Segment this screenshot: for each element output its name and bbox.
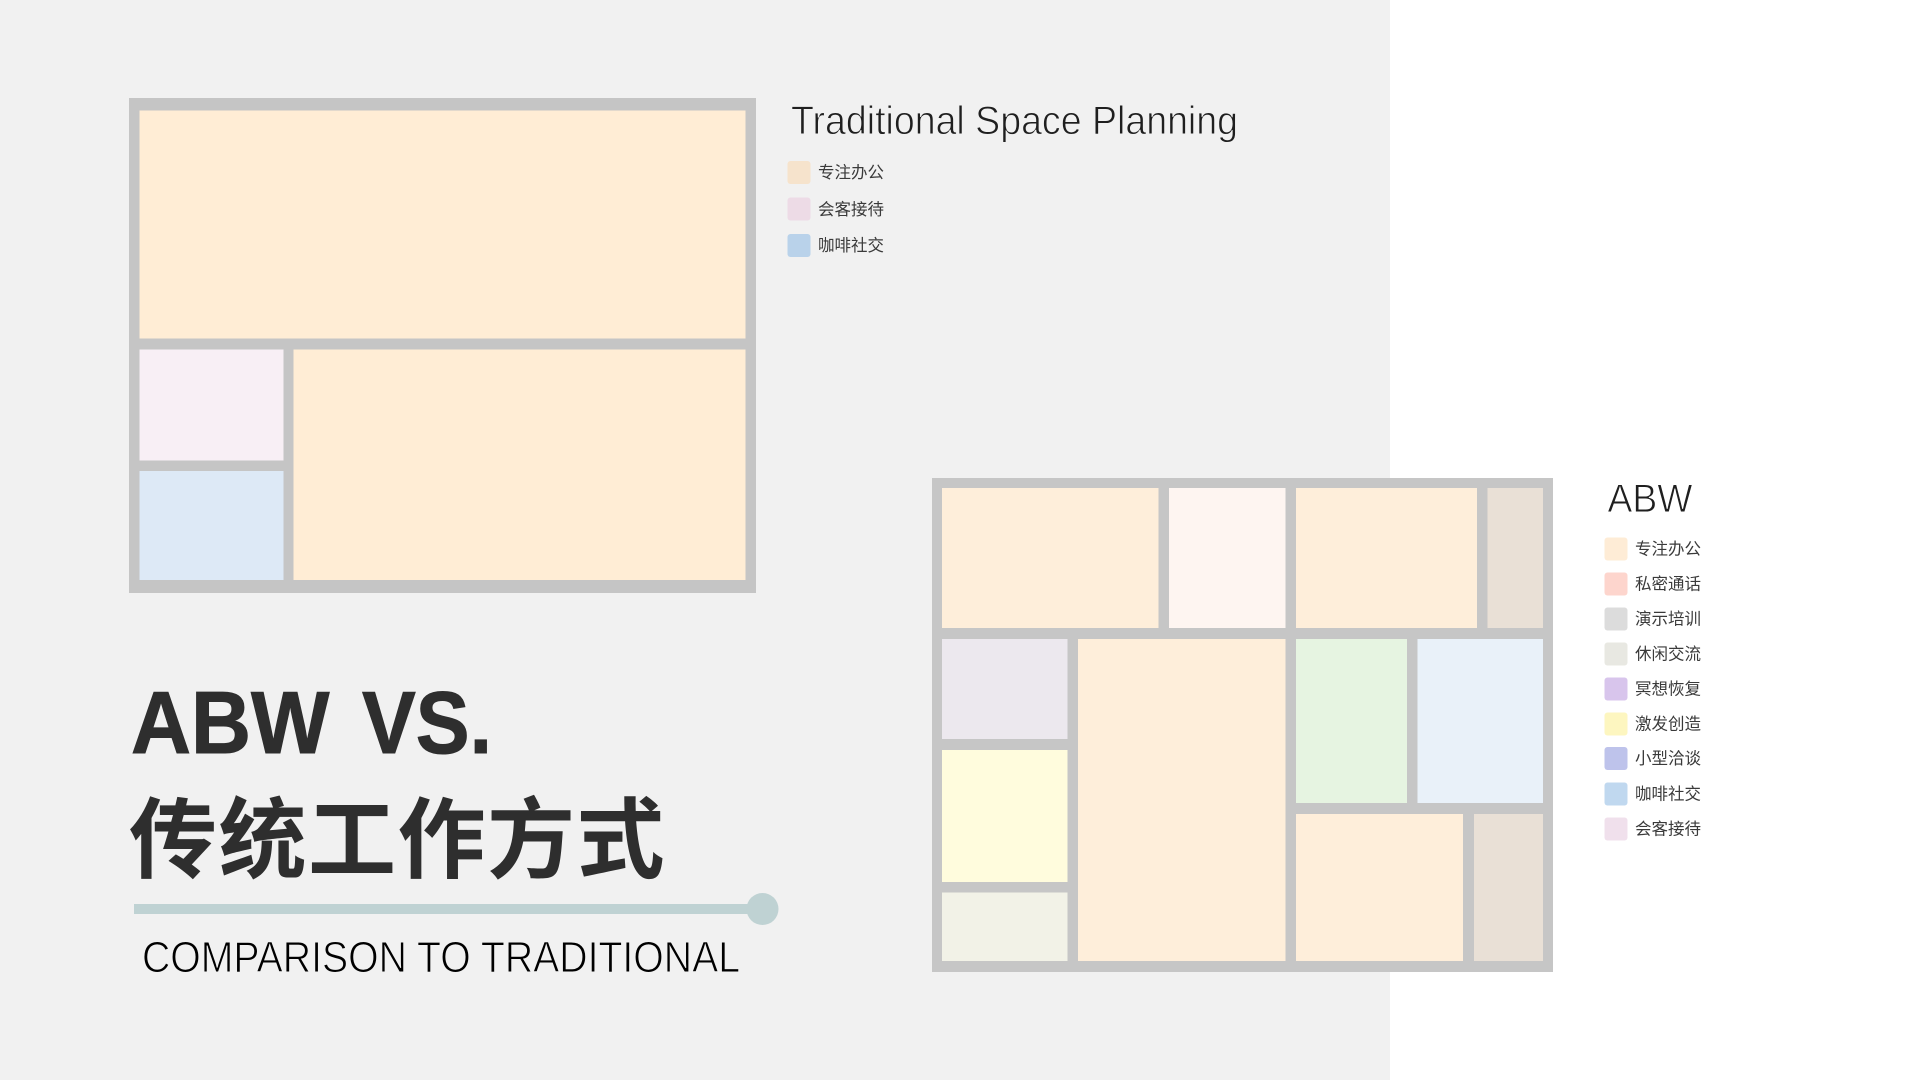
zone: focus work 1 [942,488,1158,628]
zone: focus work 3 [1296,814,1463,961]
legend: traditional [788,161,884,257]
title line 1 [131,673,492,772]
legend item: reception: 会客接待 [1635,820,1701,838]
legend item: private call: 私密通话 [1635,574,1701,594]
legend item: private call [1604,572,1701,596]
zone: leisure [942,892,1068,961]
legend item: focus work: 专注办公 [1635,540,1701,558]
zone: focus work 2 [1296,488,1477,628]
legend item: presentation [1604,608,1701,630]
title line 2: 传统工作方式 [129,791,666,890]
legend item: coffee social [1604,782,1701,806]
legend item: creativity: 激发创造 [1635,714,1702,734]
legend item: leisure [1604,642,1701,666]
legend item: reception: 会客接待 [818,200,884,219]
zone: creativity [942,750,1068,882]
heading: traditional space planning: Traditional Space Planning [791,99,1238,143]
background panel [0,0,1390,1080]
zone: presentation bottom [1474,814,1543,961]
legend item: presentation: 演示培训 [1635,610,1701,628]
legend: ABW [1604,538,1702,840]
zone: coffee [1418,639,1543,803]
divider line with dot [134,893,778,925]
heading: ABW: ABW [1608,477,1693,521]
zone: private call [1169,488,1286,628]
legend item: coffee social: 咖啡社交 [818,236,884,255]
zone: reception [140,350,284,460]
legend item: coffee social: 咖啡社交 [1635,784,1701,804]
legend item: leisure: 休闲交流 [1635,644,1701,664]
legend item: focus work [1604,538,1701,560]
title line 1: VS. [362,673,492,772]
legend item: meditation [1604,678,1701,700]
legend item: focus work: 专注办公 [818,163,884,182]
floor plan: traditional [129,98,756,593]
zone: presentation top [1488,488,1543,628]
zone: focus work bottom [294,350,746,580]
zone: coffee social [140,471,284,580]
legend item: reception [1604,818,1701,840]
subtitle: COMPARISON TO TRADITIONAL [142,933,740,982]
legend item: small meeting [1604,747,1702,770]
zone: meditation [942,639,1068,739]
zone: focus work centre [1078,639,1286,961]
zone: small meeting [1296,639,1407,803]
title [129,673,666,890]
zone: focus work top [140,110,746,338]
title line 1: ABW [131,673,330,772]
legend item: creativity [1604,712,1702,736]
floor plan: ABW [932,478,1553,972]
legend item: small meeting: 小型洽谈 [1635,749,1702,768]
legend item: meditation: 冥想恢复 [1635,680,1701,698]
